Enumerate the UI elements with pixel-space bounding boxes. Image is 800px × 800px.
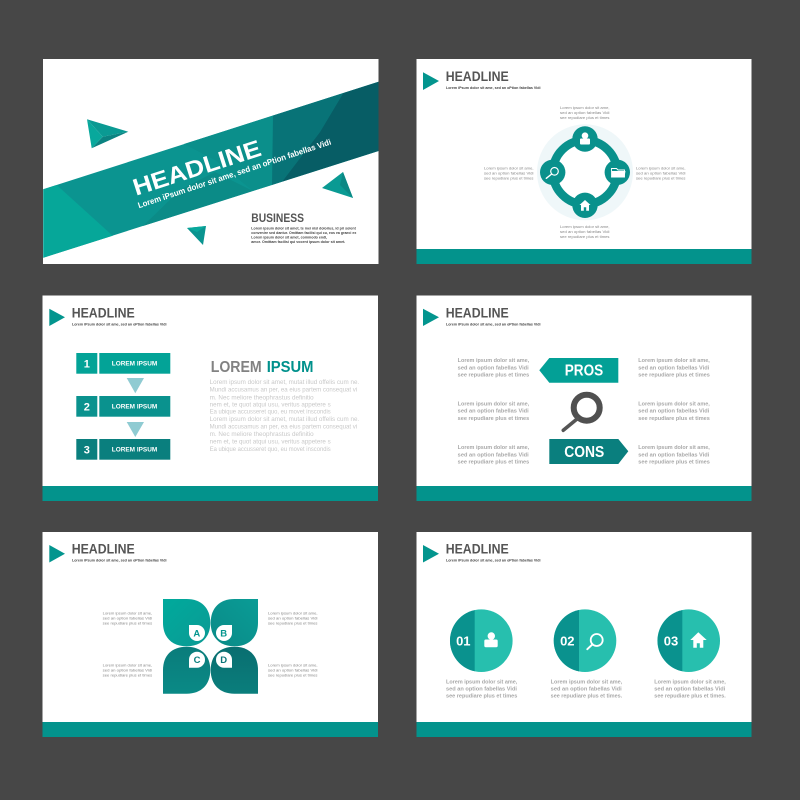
petal B — [211, 599, 258, 646]
step 1: 1 — [84, 358, 90, 370]
text block: middle right: Lorem ipsum dolor sit ame, — [638, 402, 710, 408]
text block: top — [560, 105, 610, 120]
text block: middle right: see repudiare plus et times — [638, 416, 710, 422]
circle 01: 01 — [456, 633, 471, 648]
slide header: Lorem iPsum dolor sit ame, sed an oPtion fabellas Vidi — [446, 559, 540, 563]
paragraph: Lorem ipsum dolor sit amet, mutat illud offelis cum ne. — [210, 380, 360, 386]
business body text: Lorem ipsum dolor sit amet, te mei nisl dolorius, id pri solent — [251, 227, 356, 231]
step 1 — [76, 353, 170, 374]
paragraph: nem et, te quot atqui usu, veritus appetere s — [210, 402, 331, 408]
footer bar — [42, 722, 378, 737]
text block: 01: see repudiare plus et times — [446, 694, 517, 700]
step 3: 3 — [84, 444, 90, 456]
cycle diagram — [537, 124, 633, 220]
text block: 02: see repudiare plus et times. — [551, 694, 623, 700]
business heading: BUSINESS — [251, 213, 304, 225]
circle 03: 03 — [664, 633, 678, 648]
icon: person — [484, 632, 498, 647]
text block: pros left: Lorem ipsum dolor sit ame, — [458, 358, 530, 364]
text block: right: sed an option fabellas Vidi — [636, 170, 686, 176]
text block: top: sed an option fabellas Vidi — [560, 110, 610, 115]
icon: home — [690, 632, 707, 648]
text block: pros left: see repudiare plus et times — [458, 372, 529, 378]
text block: cons right: see repudiare plus et times — [638, 459, 710, 465]
text block: 02: Lorem ipsum dolor sit ame, — [551, 680, 623, 686]
panel: cycle slide — [416, 59, 752, 264]
circle 02 — [554, 609, 616, 672]
slide header — [49, 304, 166, 326]
node: user — [572, 126, 598, 152]
node: home — [572, 193, 598, 218]
petal B: B — [220, 628, 227, 640]
text block: right: Lorem ipsum dolor sit ame, — [636, 166, 686, 170]
text block: pros right — [638, 358, 710, 378]
paragraph: m. Nec meliore theophrastus definitio — [210, 395, 314, 401]
paragraph: Mundi accusamus an per, ea eius partem consequat vi — [210, 425, 357, 431]
text block: cons right: sed an option fabellas Vidi — [638, 452, 710, 458]
panel: three circles slide — [416, 532, 752, 737]
text block: 01 — [446, 680, 518, 700]
paragraph: Ea ubique accusseret quo, eu movet inscondis — [210, 410, 331, 416]
decorative triangle: bottom — [187, 226, 206, 245]
text block: left: sed an option fabellas Vidi — [484, 170, 534, 176]
petal C: C — [194, 655, 201, 666]
pros arrow label — [539, 358, 618, 383]
text block: top: Lorem ipsum dolor sit ame, — [560, 105, 610, 110]
step 3 — [76, 439, 170, 460]
paragraph: nem et, te quot atqui usu, veritus appetere s — [210, 440, 331, 446]
petal A: A — [193, 628, 200, 640]
slide header: Lorem iPsum dolor sit ame, sed an oPtion fabellas Vidi — [72, 322, 166, 326]
petal D: D — [220, 655, 227, 666]
text block: top: see repudiare plus et times — [560, 115, 610, 120]
text block: 03: see repudiare plus et times. — [654, 694, 726, 700]
text block: cons right — [638, 445, 710, 465]
heading: lorem ipsum: IPSUM — [267, 359, 314, 376]
decorative triangle: right — [322, 172, 353, 198]
business body text: Lorem ipsum dolor sit amet, commodo endi, — [251, 236, 327, 240]
panel: numbered steps slide — [42, 296, 378, 501]
text block: B: Lorem ipsum dolor sit ame, — [268, 610, 318, 615]
footer bar — [42, 486, 378, 501]
icon: search — [587, 634, 603, 649]
text block: B: see repudiare plus et times — [268, 620, 318, 626]
text block: A: Lorem ipsum dolor sit ame, — [103, 610, 152, 615]
text block: 02: sed an option fabellas Vidi — [551, 687, 622, 693]
panel: pros and cons slide — [416, 296, 752, 501]
slide header: HEADLINE — [446, 304, 509, 320]
slide header: Lorem iPsum dolor sit ame, sed an oPtion fabellas Vidi — [446, 86, 540, 90]
step 1: LOREM IPSUM — [112, 362, 157, 368]
text block: D: sed an option fabellas Vidi — [268, 667, 318, 672]
text block: A: sed an option fabellas Vidi — [103, 615, 152, 620]
heading: lorem ipsum: LOREM — [211, 359, 262, 376]
text block: middle left: see repudiare plus et times — [458, 416, 529, 422]
diagonal banner — [43, 82, 379, 258]
paragraph: Lorem ipsum dolor sit amet, mutat illud offelis cum ne. — [210, 417, 360, 423]
text block: middle right: sed an option fabellas Vidi — [638, 409, 710, 415]
banner subtitle: Lorem iPsum dolor sit ame, sed an oPtion fabellas Vidi — [137, 138, 332, 210]
slide header: HEADLINE — [446, 68, 509, 84]
slide header: HEADLINE — [72, 304, 135, 320]
slide header — [423, 68, 540, 90]
paragraph: Ea ubique accusseret quo, eu movet inscondis — [210, 447, 331, 453]
arrow: step 2 to 3 — [127, 422, 144, 437]
text block: right — [636, 166, 686, 180]
circle 03 — [657, 609, 720, 672]
slide header — [423, 540, 540, 563]
circle 02: 02 — [560, 633, 575, 648]
text block: 03: sed an option fabellas Vidi — [654, 687, 726, 693]
text block: A: see repudiare plus et times — [103, 620, 152, 626]
arrow: step 1 to 2 — [127, 378, 144, 393]
text block: middle right — [638, 402, 710, 422]
panel: cover slide — [43, 59, 378, 264]
banner headline: HEADLINE — [130, 135, 264, 200]
paragraph — [210, 380, 360, 453]
text block: pros left: sed an option fabellas Vidi — [458, 365, 529, 371]
text block: cons left: Lorem ipsum dolor sit ame, — [458, 445, 530, 451]
text block: middle left: Lorem ipsum dolor sit ame, — [458, 402, 530, 408]
petal D — [211, 647, 258, 694]
text block: bottom: see repudiare plus et times — [560, 234, 610, 239]
footer bar — [416, 486, 752, 501]
text block: 01: sed an option fabellas Vidi — [446, 687, 518, 693]
step 2: 2 — [84, 401, 90, 413]
footer bar — [416, 722, 752, 737]
text block: cons left: sed an option fabellas Vidi — [458, 452, 529, 458]
text block: left: see repudiare plus et times — [484, 176, 534, 180]
paragraph: Mundi accusamus an per, ea eius partem consequat vi — [210, 388, 357, 394]
text block: pros left — [458, 358, 530, 378]
text block: middle left: sed an option fabellas Vidi — [458, 409, 529, 415]
text block: C: sed an option fabellas Vidi — [103, 667, 152, 672]
petal C — [163, 647, 210, 694]
text block: left — [484, 166, 534, 180]
slide header: HEADLINE — [446, 540, 509, 556]
text block: 03 — [654, 680, 726, 700]
step 3: LOREM IPSUM — [112, 448, 157, 454]
petal A — [163, 599, 210, 646]
panel: petal diagram slide — [42, 532, 378, 737]
icon: magnifier — [563, 395, 600, 430]
text block: C: Lorem ipsum dolor sit ame, — [103, 662, 152, 667]
text block: B — [268, 610, 318, 626]
text block: B: sed an option fabellas Vidi — [268, 615, 318, 620]
text block: bottom — [560, 224, 610, 239]
text block: D: see repudiare plus et times — [268, 672, 318, 678]
text block: D: Lorem ipsum dolor sit ame, — [268, 662, 318, 667]
text block: C — [103, 662, 152, 678]
text block: pros right: sed an option fabellas Vidi — [638, 365, 710, 371]
cons arrow label: CONS — [564, 444, 604, 461]
text block: C: see repudiare plus et times — [103, 672, 152, 678]
business body text: convenire sed dantur. Omittam facilisi qui cu, eos ea graeci ex — [251, 231, 357, 235]
step 2: LOREM IPSUM — [112, 404, 157, 410]
business body text: amor. Omittam facilisi qui vocent ipsum dolor sit amet. — [251, 240, 345, 244]
text block: bottom: Lorem ipsum dolor sit ame, — [560, 224, 610, 229]
text block: cons left — [458, 445, 530, 465]
slide header: Lorem iPsum dolor sit ame, sed an oPtion fabellas Vidi — [72, 559, 166, 563]
decorative triangle: left — [87, 119, 128, 148]
footer bar — [416, 249, 752, 264]
text block: A — [103, 610, 152, 626]
text block: pros right: Lorem ipsum dolor sit ame, — [638, 358, 710, 364]
cons arrow label — [549, 439, 628, 464]
text block: 02 — [551, 680, 623, 700]
circle 01 — [450, 609, 513, 672]
node: folder — [605, 160, 630, 185]
business body text — [251, 227, 357, 244]
text block: pros right: see repudiare plus et times — [638, 372, 710, 378]
text block: 03: Lorem ipsum dolor sit ame, — [654, 680, 726, 686]
slide header — [49, 540, 166, 563]
node: search — [540, 160, 565, 185]
heading: lorem ipsum — [211, 359, 314, 376]
text block: D — [268, 662, 318, 678]
pros arrow label: PROS — [565, 363, 603, 380]
text block: cons left: see repudiare plus et times — [458, 459, 529, 465]
step 2 — [76, 396, 170, 417]
slide header — [423, 304, 540, 326]
slide header: HEADLINE — [72, 540, 135, 556]
text block: middle left — [458, 402, 530, 422]
text block: left: Lorem ipsum dolor sit ame, — [484, 166, 534, 170]
text block: bottom: sed an option fabellas Vidi — [560, 229, 610, 234]
paragraph: m. Nec meliore theophrastus definitio — [210, 432, 314, 438]
text block: cons right: Lorem ipsum dolor sit ame, — [638, 445, 710, 451]
slide header: Lorem iPsum dolor sit ame, sed an oPtion fabellas Vidi — [446, 322, 540, 326]
text block: 01: Lorem ipsum dolor sit ame, — [446, 680, 518, 686]
text block: right: see repudiare plus et times — [636, 176, 686, 180]
